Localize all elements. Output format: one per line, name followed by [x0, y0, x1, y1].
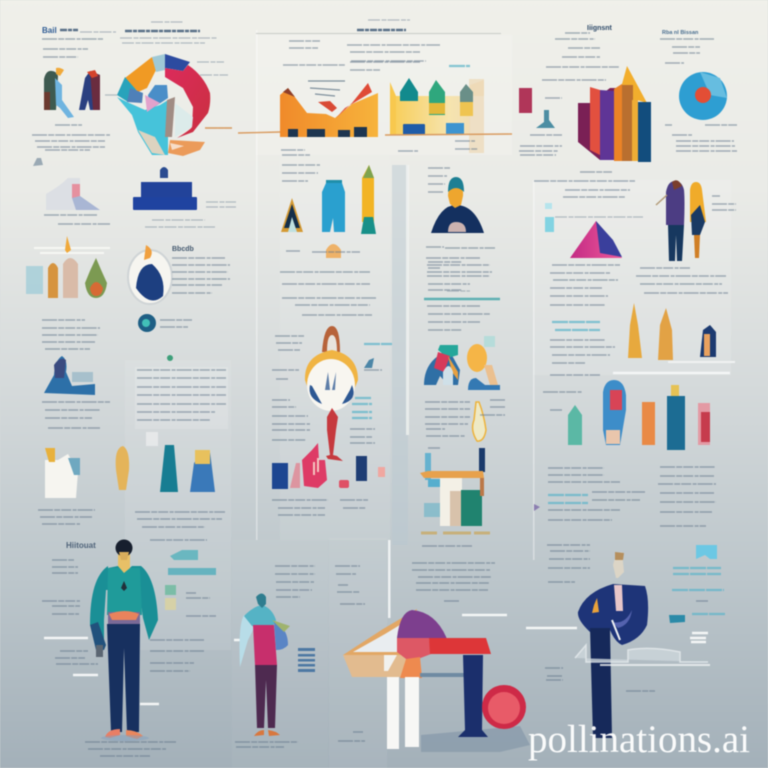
text block: middle right column: [426, 258, 492, 290]
person: two standing figures: [656, 180, 706, 261]
text block: bottles left: [543, 392, 582, 410]
text block: lower right far: [658, 467, 716, 526]
text block: centre top: [289, 41, 440, 61]
icon: pale mountain: [46, 178, 100, 210]
text block: row under icons: [280, 251, 376, 315]
text block: pedestal notes: [145, 202, 236, 227]
person: small figure in pink: [240, 594, 290, 736]
illustration: table figure with red ball: [343, 609, 530, 752]
text block: lower right block 1: [548, 468, 620, 482]
text block: mountain caption: [44, 215, 110, 224]
icon: colourful figure: [424, 345, 460, 385]
icon: flask: [473, 402, 486, 441]
chart: orange mountains: [280, 81, 378, 137]
icon: bowl: [326, 244, 341, 258]
text block: table caption strip: [421, 532, 493, 534]
panel: teal chart in lower card: [165, 550, 216, 610]
chart: yellow houses: [390, 78, 484, 153]
icon: three busts: [26, 236, 110, 298]
icon: tan pillar: [116, 446, 129, 490]
heading: top left: [42, 26, 116, 35]
icon: cyan tag: [669, 545, 717, 623]
text block: right column upper: [636, 268, 728, 293]
heading: right top: Iiignsnt: [587, 25, 613, 32]
text block: lower right: [545, 668, 655, 691]
text block: oval head notes: Bbcdb: [172, 246, 194, 253]
text block: lower left column: [38, 510, 95, 524]
text block: small figure notes: [275, 566, 315, 597]
icon: blue pedestal: [133, 167, 197, 210]
text block: man notes: [547, 545, 708, 601]
icon: seated figure: [44, 356, 95, 395]
icon: pink rectangle: [519, 88, 532, 113]
callout lines: donut: [105, 62, 232, 128]
text block: cyan callouts: [672, 568, 725, 614]
callouts: white rules: [462, 615, 577, 628]
icon: small circle: [138, 314, 173, 361]
text block: oval head notes: [172, 246, 230, 293]
text block: right top: [546, 33, 714, 67]
icon: white figure: [45, 448, 80, 498]
panel: text card: [135, 367, 228, 429]
text block: central notes: [272, 336, 304, 379]
heading: centre top: [357, 20, 410, 30]
icon: blue pants: [322, 180, 345, 232]
text block: right notes: [350, 370, 382, 443]
icon: pair of figures: [44, 68, 100, 118]
heading: lower left: Hiitouat: [66, 541, 96, 550]
text block: left of man: [42, 560, 80, 614]
text block: right column: [550, 265, 620, 305]
icon: orange statue group: [628, 303, 735, 362]
arrow: orange connector: [205, 128, 512, 135]
text block: below figures: [32, 125, 110, 150]
icon: yellow rocket: [361, 165, 376, 234]
icon: pink hand: [272, 443, 385, 489]
text block: column caption: [338, 732, 365, 741]
text block: row under hand: [272, 500, 368, 515]
text block: middle right lower: [425, 400, 505, 424]
person: tall man in teal: [90, 540, 158, 741]
text block: lower card notes: [150, 540, 216, 671]
icon: table with boxes: [420, 448, 485, 526]
text block: left of stem: [272, 400, 310, 440]
icon: blue stripe block: [298, 648, 315, 672]
icon: teal and blue figures: [146, 432, 215, 492]
person: tall man in navy: [578, 552, 648, 738]
icon: triangle: [281, 198, 303, 232]
icon: small white stack: [690, 633, 708, 642]
text block: column at 335: [335, 566, 365, 604]
text block: small figure caption: [235, 742, 298, 747]
text block: donut intro: [120, 38, 217, 43]
text block: lower card: [135, 512, 225, 527]
callout: cyan notes: [352, 344, 392, 418]
text block: top left intro: [42, 39, 103, 57]
icon: yellow oval sitting: [467, 336, 500, 390]
heading: right top: [587, 25, 699, 36]
icon: magenta pyramid: [570, 221, 622, 258]
text block: under bars: [534, 172, 635, 197]
icon: hooded head figure: [305, 326, 358, 461]
heading: donut title: [125, 22, 200, 31]
callouts: white accents: [44, 638, 247, 704]
heading: top left: Bail: [42, 26, 57, 35]
illustration: pale hill behind man: [575, 645, 710, 665]
text block: mid-right lines: [550, 340, 615, 375]
text block: centre column: [412, 546, 495, 601]
text block: lower right body: [548, 492, 645, 520]
chart: blue circle: [679, 72, 727, 120]
rule: [555, 216, 643, 218]
chart: tall bars: [578, 66, 651, 162]
rule: white: [613, 372, 730, 374]
icon: small stack: [33, 158, 43, 166]
panels: lighter and darker background columns: [125, 30, 731, 768]
icon: row of bottles: [568, 380, 710, 450]
text block: circle notes: [160, 320, 192, 327]
icon: pale cyan tags: [545, 203, 554, 232]
text block: below seated figure: [42, 402, 110, 428]
text block: left column: [42, 320, 100, 349]
text block: chart footer: [281, 141, 478, 181]
heading: yellow chart label: [449, 65, 470, 67]
text block: cyan lines: [426, 429, 465, 448]
text block: figures right: [712, 196, 736, 210]
icon: small figure: [536, 110, 555, 128]
icon: oval head: [128, 245, 172, 304]
text block: bust notes: [428, 168, 450, 192]
text block: orange chart labels: [283, 62, 420, 70]
text block: cyan rule: [424, 291, 500, 330]
text block: bust footer: [426, 247, 495, 268]
icon: purple dot: [534, 504, 540, 511]
chart: circular donut: [117, 54, 210, 156]
text block: mid-right column: [552, 322, 600, 330]
text block: blue circle notes: [665, 125, 737, 151]
text block: lower right cyan: [548, 495, 588, 503]
text block: man caption: [85, 742, 176, 756]
person: bust with cap: [431, 177, 484, 233]
text block: bar chart left: [519, 80, 606, 155]
heading: right top: Rba nl Bissan: [662, 30, 699, 36]
text block: lower caption: [55, 651, 98, 664]
watermark: pollinations.ai: [528, 718, 750, 761]
